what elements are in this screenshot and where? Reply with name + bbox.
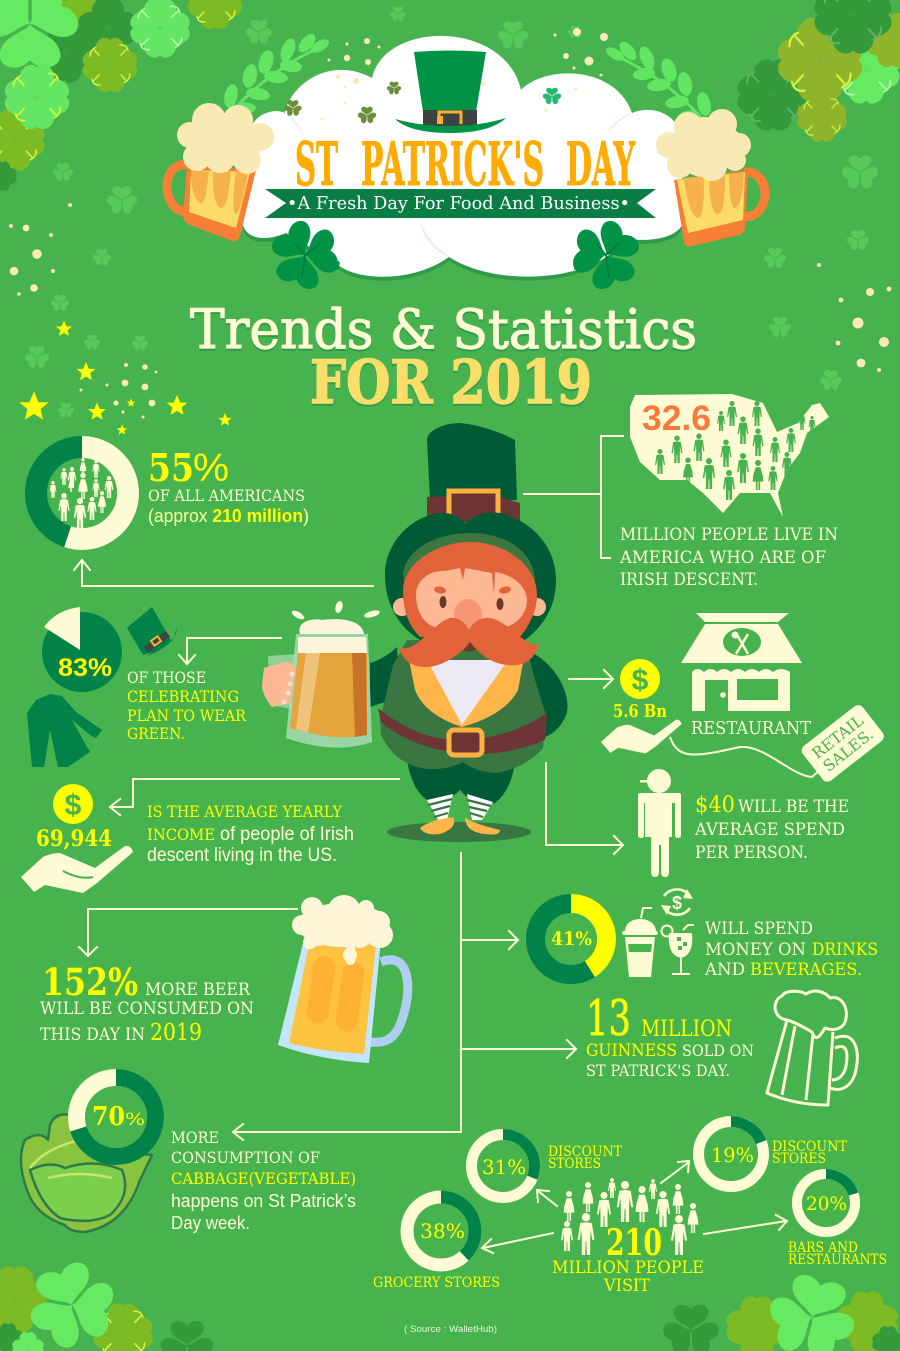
stat text: wear green: OF THOSE <box>127 668 206 687</box>
icon: USA map with people <box>630 394 829 517</box>
stat text: 55 percent of Americans <box>148 445 309 526</box>
stars <box>19 320 232 434</box>
icon: beer glass held by leprechaun <box>262 600 381 748</box>
arrow: to 38 percent <box>482 1233 553 1253</box>
label: bars and restaurants <box>788 1240 887 1268</box>
stat text: 13 million Guinness: GUINNESS <box>586 1041 677 1061</box>
ribbon subtitle: •A Fresh Day For Food And Business• <box>287 193 630 214</box>
stat: 41 percent donut <box>536 904 606 974</box>
icon: restaurant <box>681 613 802 711</box>
arrow: to drinks <box>461 931 518 949</box>
heading: Trends & Statistics: Trends & Statistics <box>190 300 697 363</box>
icon: dollar coin 5.6 Bn <box>620 659 660 699</box>
heading: Trends & Statistics: Trends & Statistics <box>190 298 697 361</box>
heading: For 2019: FOR 2019 <box>310 350 592 420</box>
stat text: wear green <box>127 668 247 743</box>
stat text: drinks: MONEY ON <box>705 940 806 960</box>
stat text: wear green: GREEN. <box>127 724 185 743</box>
label: discount stores 19: STORES <box>772 1151 826 1167</box>
icon: green jacket <box>27 694 102 767</box>
stat text: 152 percent beer: 2019 <box>150 1020 202 1046</box>
stat text: 152 percent beer: MORE BEER <box>145 980 251 1000</box>
stat text: cabbage: CABBAGE(VEGETABLE) <box>171 1169 356 1188</box>
stat: 70 percent donut with cabbage: % <box>125 1110 145 1130</box>
retail sales tag <box>670 703 886 784</box>
bottom left clover cluster <box>0 1252 216 1351</box>
stat: 55 percent donut <box>36 447 128 539</box>
arrow: to wear green <box>179 638 281 664</box>
stat: 69,944: 69,944 <box>36 826 112 852</box>
stat text: yearly income: of people of Irish <box>220 824 354 845</box>
icon: small hat <box>127 607 177 656</box>
leprechaun character <box>370 423 567 842</box>
stat text: 152 percent beer: WILL BE CONSUMED ON <box>40 999 254 1019</box>
donut: 19 percent discount stores: 19% <box>711 1143 754 1167</box>
label: discount stores 19 <box>772 1139 848 1167</box>
arrow: to 20 percent <box>704 1215 787 1234</box>
branch: right laurel <box>604 39 713 122</box>
stat text: average spend <box>694 793 849 863</box>
retail sales tag: SALES. <box>820 725 877 776</box>
stat text: Irish descent: AMERICA WHO ARE OF <box>619 548 826 568</box>
label: bars and restaurants: BARS AND <box>788 1240 858 1256</box>
stat text: 55 percent of Americans: (approx 210 million) <box>148 506 309 526</box>
stat text: wear green: CELEBRATING <box>127 687 239 706</box>
icon: dollar cycle: $ <box>672 893 682 913</box>
label: discount stores 31 <box>548 1144 623 1172</box>
stat text: average spend: PER PERSON. <box>695 843 808 863</box>
arrow: to beer stat <box>79 909 297 956</box>
stat text: average spend: $40 <box>695 793 735 818</box>
title: St Patrick's Day <box>295 130 636 200</box>
stat text: 13 million Guinness: SOLD ON <box>682 1041 754 1060</box>
donut: 19 percent discount stores <box>698 1122 764 1186</box>
stat: 70 percent donut with cabbage: 70 <box>92 1102 125 1132</box>
icon: clover right <box>555 207 655 306</box>
title: St Patrick's Day: PATRICK'S <box>361 130 544 200</box>
arrow: to restaurant sales <box>569 670 613 688</box>
stat text: cabbage: CONSUMPTION OF <box>171 1148 320 1167</box>
donut: 31 percent discount stores <box>472 1134 534 1198</box>
trunk connector with arrow to cabbage <box>233 853 461 1140</box>
stat text: 152 percent beer <box>40 960 254 1046</box>
stat text: average spend: AVERAGE SPEND <box>694 820 845 840</box>
stat text: yearly income: INCOME <box>147 825 215 844</box>
icon: cocktail glass <box>662 925 694 974</box>
stat text: Irish descent <box>619 525 838 590</box>
label: discount stores 19: DISCOUNT <box>772 1139 848 1155</box>
icon: large beer mug <box>278 895 408 1063</box>
stat text: yearly income: descent living in the US. <box>147 845 337 866</box>
stat text: yearly income: IS THE AVERAGE YEARLY <box>147 802 342 821</box>
donut: 31 percent discount stores: 31% <box>482 1155 526 1179</box>
source note: ( Source : WalletHub) <box>404 1324 497 1335</box>
label: million people visit: VISIT <box>603 1276 651 1296</box>
label: bars and restaurants: RESTAURANTS <box>788 1252 887 1268</box>
stat text: cabbage: Day week. <box>171 1213 250 1233</box>
stat text: Irish descent: IRISH DESCENT. <box>620 570 758 590</box>
stat text: cabbage: MORE <box>171 1128 219 1147</box>
stat text: 13 million Guinness: MILLION <box>641 1017 732 1042</box>
icon: green top hat <box>395 50 506 133</box>
heading: For 2019: FOR 2019 <box>310 348 592 418</box>
icon: USA map with people: 32.6 <box>642 399 711 438</box>
donut: 20 percent bars and restaurants: 20% <box>806 1193 847 1215</box>
arrow: to 19 percent <box>661 1161 689 1183</box>
stat text: 55 percent of Americans: % <box>193 447 229 490</box>
stat: 41 percent donut: 41% <box>551 928 592 950</box>
stat text: drinks: WILL SPEND <box>705 919 813 939</box>
label: discount stores 31: STORES <box>548 1156 601 1172</box>
stat text: wear green: PLAN TO WEAR <box>127 706 247 725</box>
label: million people visit: MILLION PEOPLE <box>552 1258 704 1278</box>
arrow: to Guinness <box>461 1040 576 1058</box>
stat text: cabbage: happens on St Patrick’s <box>171 1191 356 1211</box>
label: grocery stores: GROCERY STORES <box>373 1275 500 1291</box>
stat text: 152 percent beer: 152% <box>42 960 138 1004</box>
ribbon subtitle <box>265 189 656 218</box>
stat text: cabbage <box>171 1128 356 1233</box>
connector: USA stat <box>524 436 623 558</box>
stat: 210: 210 <box>606 1222 662 1264</box>
stat text: 13 million Guinness: 13 <box>586 990 631 1047</box>
stat: 83 percent pie <box>42 607 122 692</box>
icon: dollar coin income <box>53 784 93 824</box>
icon: drink cup <box>622 908 658 977</box>
stat: 83 percent pie: 83% <box>58 654 112 682</box>
icon: beer mug left <box>167 103 274 241</box>
label: restaurant: RESTAURANT <box>691 718 811 739</box>
stat text: 152 percent beer: THIS DAY IN <box>40 1025 145 1045</box>
bottom right clover cluster <box>660 1267 900 1351</box>
faint scattered clovers <box>24 7 880 418</box>
icon: dollar cycle <box>661 889 693 915</box>
arrow: to 31 percent <box>537 1190 557 1206</box>
stat text: drinks <box>704 919 878 980</box>
header cloud <box>243 36 682 281</box>
label: discount stores 31: DISCOUNT <box>548 1144 623 1160</box>
title: St Patrick's Day: ST <box>295 130 338 200</box>
icon: clover left <box>256 207 356 306</box>
icon: dollar coin 5.6 Bn: $ <box>632 664 649 697</box>
stat text: Irish descent: MILLION PEOPLE LIVE IN <box>620 525 838 545</box>
icon: person with cap <box>638 769 681 877</box>
label: million people visit <box>552 1258 704 1296</box>
donut: 38 percent grocery: 38% <box>420 1219 465 1243</box>
icon: beer mug right <box>656 109 765 246</box>
icon: crowd of people <box>561 1178 698 1255</box>
retail sales tag: RETAIL <box>809 711 867 763</box>
stat text: drinks: DRINKS <box>812 940 878 960</box>
title: St Patrick's Day: DAY <box>566 130 636 200</box>
stat text: 55 percent of Americans: OF ALL AMERICANS <box>148 486 305 505</box>
stat text: 13 million Guinness: ST PATRICK'S DAY. <box>586 1061 730 1080</box>
stat text: yearly income <box>147 802 354 866</box>
top right clover cluster <box>733 0 900 145</box>
stat text: drinks: AND <box>704 960 745 980</box>
arrow: to average spend <box>546 763 623 854</box>
icon: outlined beer mug <box>767 991 857 1105</box>
stat: 5.6 Bn: 5.6 Bn <box>613 701 667 722</box>
donut: 38 percent grocery <box>407 1197 475 1265</box>
bubbles <box>9 28 891 418</box>
icon: dollar coin income: $ <box>65 789 82 822</box>
branch: left laurel <box>222 31 331 114</box>
arrow: to income <box>110 779 399 815</box>
stat text: average spend: WILL BE THE <box>738 797 849 817</box>
stat text: 13 million Guinness <box>586 990 754 1080</box>
icon: giving hand <box>601 720 682 754</box>
donut: 20 percent bars and restaurants <box>797 1174 855 1232</box>
stat: 70 percent donut with cabbage <box>21 1078 156 1232</box>
arrow: to 55 percent <box>74 560 373 586</box>
stat text: drinks: BEVERAGES. <box>750 960 862 980</box>
top left clover cluster <box>0 0 245 193</box>
icon: receiving hand <box>21 846 133 893</box>
stat text: 55 percent of Americans: 55 <box>148 445 194 490</box>
